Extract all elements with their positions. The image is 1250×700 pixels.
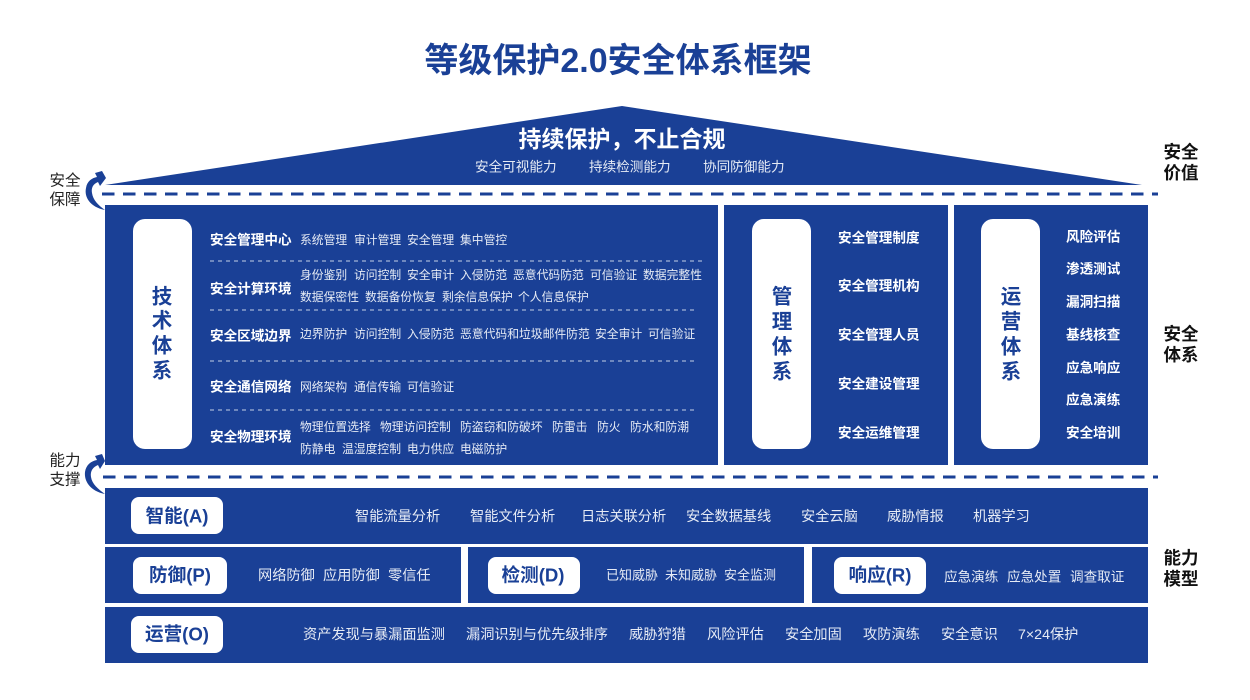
row: physical environment: 防水和防潮	[630, 420, 689, 434]
panel: intelligence band: 智能文件分析	[470, 509, 555, 525]
lower dashed divider	[103, 476, 1158, 478]
panel: detection band	[468, 547, 804, 603]
panel: response band: 应急演练	[944, 568, 999, 584]
panel: protection band: 网络防御	[258, 568, 315, 584]
label: capability model: 能力	[1164, 548, 1198, 568]
panel: management system: 安全管理制度	[838, 230, 920, 246]
panel: management system	[724, 205, 948, 465]
pill: management system: 管	[772, 286, 792, 308]
label: capability support: 能力	[49, 452, 81, 470]
row: secure area boundary: 边界防护	[300, 327, 347, 341]
row: security management center: 审计管理	[354, 233, 401, 247]
row: secure area boundary: 安全审计	[595, 327, 642, 341]
pill: management system: 系	[772, 360, 792, 384]
panel: operation band: 7×24保护	[1018, 627, 1078, 643]
row: security management center: 系统管理	[300, 233, 347, 247]
panel: detection band: 未知威胁	[665, 568, 717, 582]
panel: response band: 应急处置	[1007, 568, 1061, 584]
panel: response band	[812, 547, 1148, 603]
panel: operation band: 攻防演练	[863, 627, 920, 643]
panel: detection band: 安全监测	[724, 568, 776, 582]
panel: technical system	[105, 205, 718, 465]
row: security management center: 安全管理中心	[210, 232, 292, 248]
label: security system	[1164, 324, 1199, 365]
panel: response band: 响应(R)	[848, 564, 912, 586]
panel: operation band: 安全加固	[785, 626, 842, 643]
pill: technical system	[133, 219, 192, 449]
row: secure computing environment: 个人信息保护	[518, 290, 589, 304]
panel: intelligence band: 机器学习	[973, 509, 1030, 525]
row: physical environment: 物理访问控制	[380, 420, 451, 434]
row: secure computing environment: 安全审计	[407, 268, 454, 282]
panel: roof security value: 持续保护，不止合规	[518, 126, 726, 152]
label: security value: 价值	[1164, 163, 1198, 183]
label: capability support	[49, 452, 81, 488]
pill: technical system: 技	[152, 286, 173, 308]
pill: operations system	[981, 219, 1040, 449]
panel: operation band: 运营(O)	[145, 624, 209, 644]
row: security management center: 安全管理	[407, 233, 454, 247]
panel: operation band: 漏洞识别与优先级排序	[466, 627, 608, 643]
panel: operations system: 安全培训	[1066, 424, 1120, 440]
label: security value: 安全	[1164, 142, 1199, 162]
panel: operations system: 应急响应	[1066, 360, 1121, 376]
label: security assurance: 保障	[49, 190, 81, 208]
row: secure computing environment: 数据完整性	[643, 268, 702, 282]
panel: intelligence band: 智能(A)	[146, 506, 208, 526]
pill: management system	[752, 219, 811, 449]
pill: management system: 理	[772, 310, 792, 334]
row: secure computing environment	[210, 268, 702, 304]
label: security system: 安全	[1164, 324, 1199, 344]
row: physical environment: 防静电	[300, 442, 336, 456]
title: 等级保护2.0安全体系框架	[424, 42, 812, 80]
panel: protection band: 防御(P)	[149, 564, 211, 586]
row: physical environment: 物理位置选择	[300, 420, 371, 434]
row: secure computing environment: 数据保密性	[300, 290, 359, 304]
row: physical environment: 防火	[597, 420, 621, 434]
panel: operations system: 漏洞扫描	[1066, 294, 1121, 310]
panel: intelligence band: 安全数据基线	[686, 508, 771, 525]
panel: detection band: 已知威胁	[606, 568, 658, 582]
row: secure communication network: 可信验证	[407, 380, 454, 394]
label: capability support: 支撑	[49, 470, 81, 488]
panel: intelligence band: 安全云脑	[801, 508, 858, 525]
row: secure communication network: 安全通信网络	[210, 378, 292, 394]
panel: operations system: 渗透测试	[1066, 260, 1121, 276]
panel: management system: 安全建设管理	[838, 376, 920, 392]
panel: roof security value: 协同防御能力	[703, 160, 785, 174]
panel: operation band	[105, 607, 1148, 663]
label: security assurance	[49, 172, 81, 208]
panel: response band: 调查取证	[1070, 570, 1125, 584]
panel: operations system: 风险评估	[1066, 228, 1121, 244]
row: secure communication network: 通信传输	[354, 380, 401, 394]
panel: roof security value: 持续检测能力	[589, 160, 671, 174]
row: secure area boundary: 恶意代码和垃圾邮件防范	[460, 327, 590, 341]
panel: protection band: 应用防御	[323, 567, 380, 584]
row: secure communication network	[210, 378, 454, 394]
pill: technical system: 术	[152, 310, 173, 332]
panel: operations system: 应急演练	[1066, 392, 1121, 408]
label: security value	[1164, 142, 1199, 183]
panel: management system: 安全管理人员	[838, 326, 920, 342]
row: physical environment: 安全物理环境	[210, 428, 292, 444]
pill: technical system: 系	[152, 360, 172, 382]
panel: operations system	[954, 205, 1148, 465]
row: secure computing environment: 剩余信息保护	[442, 290, 513, 304]
pill: technical system: 体	[152, 334, 173, 358]
row: physical environment: 电力供应	[407, 442, 454, 456]
row: secure area boundary	[210, 327, 695, 344]
pill: operations system: 运	[1001, 286, 1022, 308]
panel: intelligence band: 智能流量分析	[355, 509, 440, 525]
row: secure computing environment: 数据备份恢复	[365, 290, 436, 304]
upper dashed divider	[102, 192, 1158, 196]
panel: protection band: 零信任	[388, 568, 431, 584]
row: physical environment: 电磁防护	[460, 442, 507, 456]
row: secure computing environment: 恶意代码防范	[513, 268, 584, 282]
label: security assurance: 安全	[49, 172, 81, 190]
row: secure computing environment: 身份鉴别	[300, 268, 347, 282]
pill: management system: 体	[772, 336, 793, 358]
row: physical environment: 防盗窃和防破坏	[460, 420, 543, 434]
row: security management center: 集中管控	[460, 233, 507, 247]
row: secure computing environment: 入侵防范	[460, 268, 507, 282]
panel: management system: 安全运维管理	[838, 424, 920, 440]
row: secure area boundary: 安全区域边界	[210, 328, 292, 344]
label: security system: 体系	[1164, 345, 1198, 365]
label: capability model	[1164, 548, 1198, 589]
pill: operations system: 系	[1001, 360, 1021, 384]
panel: operation band: 风险评估	[707, 627, 764, 643]
panel: protection band	[105, 547, 461, 603]
row: secure communication network: 网络架构	[300, 380, 347, 394]
row: physical environment	[210, 420, 689, 456]
row: security management center	[210, 232, 507, 248]
row: secure area boundary: 访问控制	[354, 327, 401, 341]
panel: intelligence band: 威胁情报	[887, 509, 944, 525]
icon: capability support arrow	[85, 454, 105, 494]
panel: detection band: 检测(D)	[502, 564, 564, 586]
row: secure computing environment: 访问控制	[354, 268, 401, 282]
row: secure area boundary: 入侵防范	[407, 327, 454, 341]
pill: operations system: 体	[1001, 336, 1022, 358]
panel: roof security value: 安全可视能力	[475, 158, 557, 174]
icon: security assurance arrow	[86, 171, 106, 210]
row: secure computing environment: 安全计算环境	[210, 280, 292, 296]
row: secure computing environment: 可信验证	[590, 268, 637, 282]
row: physical environment: 温湿度控制	[342, 442, 401, 456]
label: capability model: 模型	[1164, 569, 1198, 589]
panel: operations system: 基线核查	[1066, 326, 1121, 342]
panel: operation band: 资产发现与暴漏面监测	[303, 627, 445, 643]
panel: intelligence band: 日志关联分析	[581, 509, 666, 525]
panel: management system: 安全管理机构	[838, 278, 920, 294]
panel: operation band: 安全意识	[941, 626, 998, 643]
panel: roof security value	[105, 106, 1142, 185]
row: physical environment: 防雷击	[552, 420, 588, 434]
panel: intelligence band	[105, 488, 1148, 544]
pill: operations system: 营	[1001, 310, 1021, 334]
panel: operation band: 威胁狩猎	[629, 627, 686, 643]
row: secure area boundary: 可信验证	[648, 327, 695, 341]
